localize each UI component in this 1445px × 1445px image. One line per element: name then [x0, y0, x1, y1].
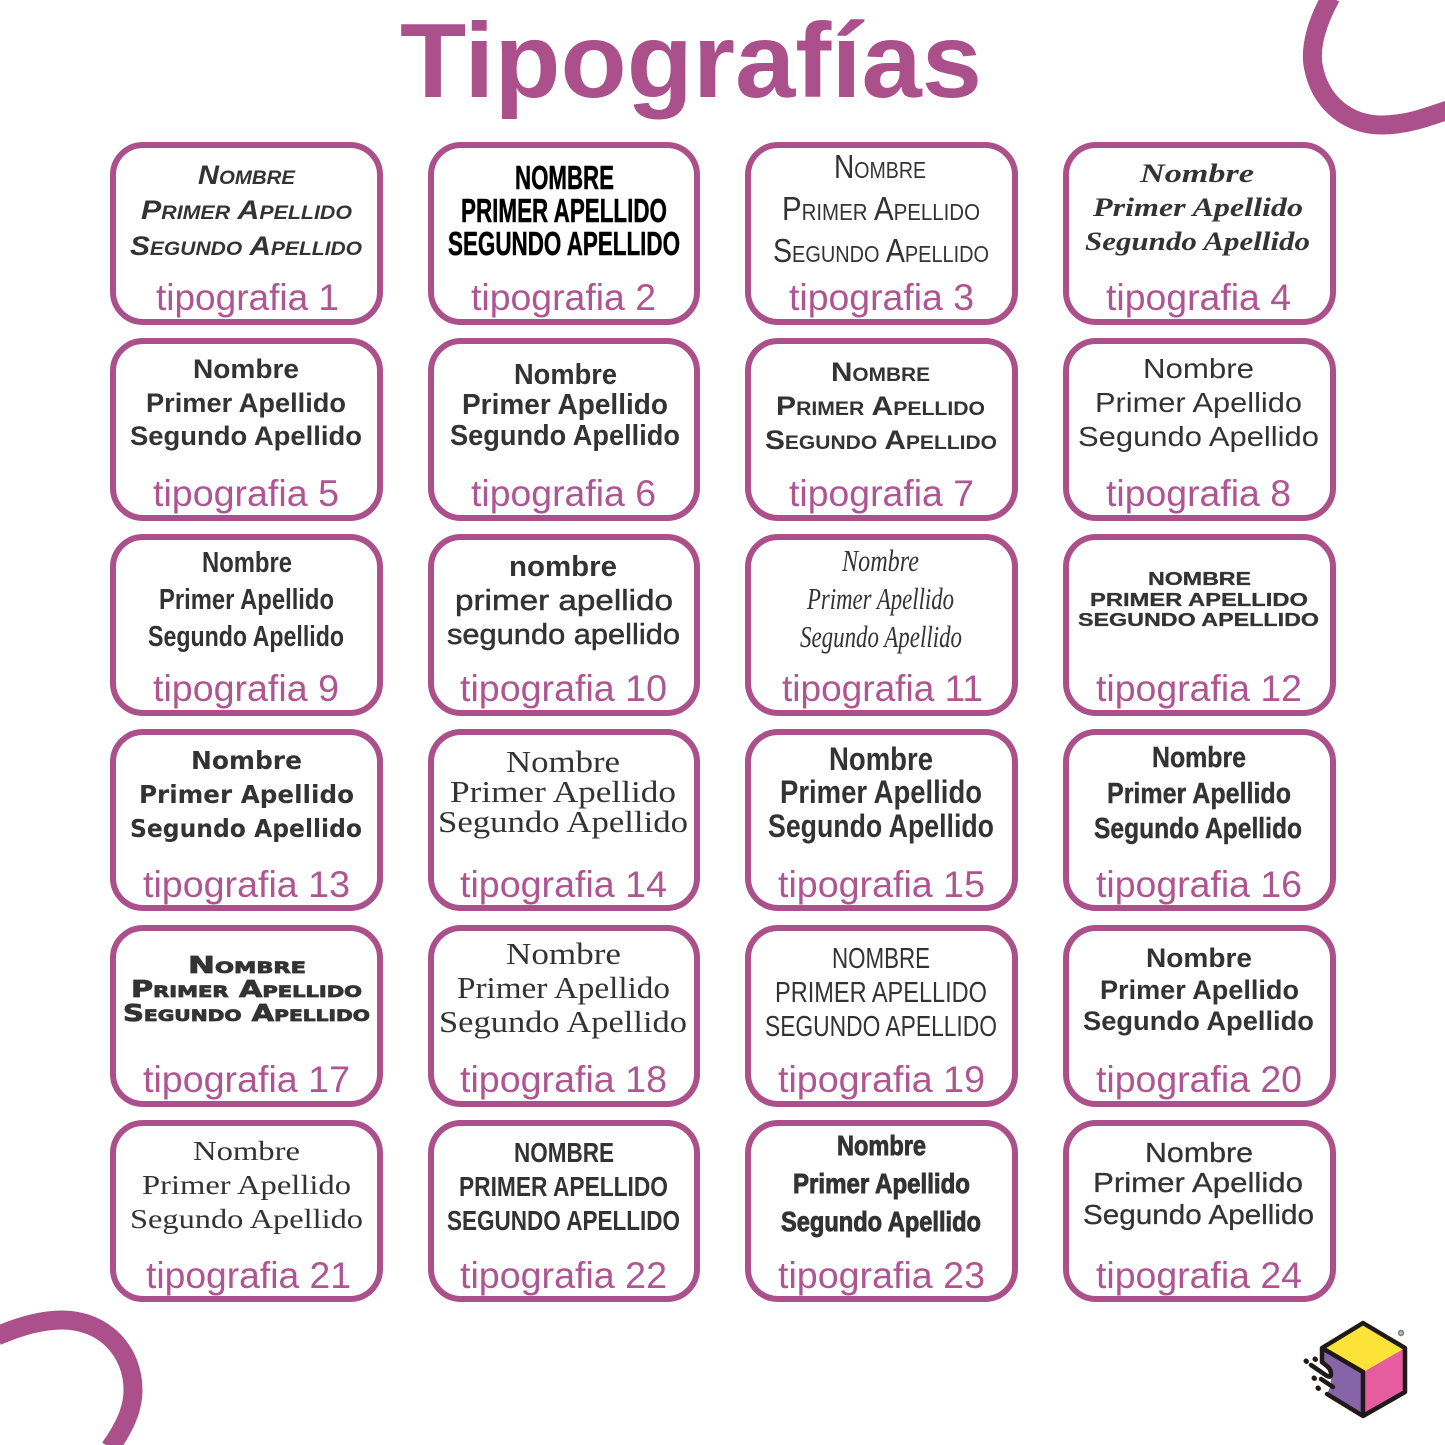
panel: tipografia 20: tipografia 20: [1096, 1059, 1302, 1100]
panel: tipografia 21: Segundo Apellido: [130, 1204, 363, 1234]
panel: tipografia 16: tipografia 16: [1096, 864, 1302, 905]
panel: tipografia 3: [748, 145, 1015, 322]
panel: tipografia 1: [113, 145, 380, 322]
panel: tipografia 19: NOMBRE: [832, 943, 930, 975]
panel: tipografia 6: Primer Apellido: [462, 389, 668, 421]
panel: tipografia 20: [1066, 928, 1333, 1104]
panel: tipografia 13: tipografia 13: [143, 864, 350, 905]
panel: tipografia 22: PRIMER APELLIDO: [459, 1171, 668, 1202]
icon: cube logo: [1306, 1323, 1405, 1416]
panel: tipografia 4: tipografia 4: [1106, 277, 1291, 318]
panel: tipografia 19: tipografia 19: [778, 1059, 985, 1100]
panel: tipografia 8: tipografia 8: [1106, 473, 1291, 514]
panel: tipografia 5: [113, 341, 380, 518]
panel: tipografia 18: tipografia 18: [460, 1059, 667, 1100]
panel: tipografia 9: Nombre: [202, 547, 292, 579]
panel: tipografia 17: Nombre: [188, 953, 306, 979]
panel: tipografia 15: Primer Apellido: [780, 774, 982, 810]
panel: tipografia 7: [748, 341, 1015, 518]
panel: tipografia 2: tipografia 2: [471, 277, 656, 318]
panel: tipografia 11: Segundo Apellido: [800, 619, 962, 654]
panel: tipografia 15: [748, 732, 1015, 908]
panel: tipografia 2: SEGUNDO APELLIDO: [448, 225, 680, 262]
panel: tipografia 4: [1066, 145, 1333, 322]
panel: tipografia 4: Segundo Apellido: [1085, 227, 1310, 256]
panel: tipografia 23: Segundo Apellido: [781, 1206, 981, 1237]
panel: tipografia 21: tipografia 21: [146, 1255, 351, 1296]
panel: tipografia 16: Nombre: [1152, 742, 1246, 774]
panel: tipografia 18: Primer Apellido: [457, 970, 670, 1005]
panel: tipografia 21: Primer Apellido: [142, 1170, 351, 1200]
panel: tipografia 23: Primer Apellido: [793, 1168, 970, 1199]
panel: tipografia 6: tipografia 6: [471, 473, 656, 514]
panel: tipografia 17: [113, 928, 380, 1104]
title: Tipografías: [400, 2, 982, 120]
panel: tipografia 9: Segundo Apellido: [148, 621, 344, 653]
panel: tipografia 14: Nombre: [506, 744, 620, 779]
panel: tipografia 20: Nombre: [1146, 943, 1252, 973]
panel: tipografia 1: Segundo Apellido: [130, 231, 362, 261]
panel: tipografia 17: tipografia 17: [143, 1059, 350, 1100]
panel: tipografia 18: Segundo Apellido: [439, 1004, 687, 1039]
panel: tipografia 10: tipografia 10: [460, 668, 667, 709]
panel: tipografia 9: Primer Apellido: [159, 584, 334, 616]
panel: tipografia 3: Segundo Apellido: [773, 232, 989, 269]
panel: tipografia 22: SEGUNDO APELLIDO: [447, 1205, 680, 1236]
panel: tipografia 10: nombre: [509, 551, 617, 583]
panel: tipografia 15: Segundo Apellido: [768, 808, 994, 844]
panel: tipografia 12: PRIMER APELLIDO: [1090, 590, 1308, 610]
panel: tipografia 14: [431, 732, 697, 908]
panel: tipografia 1: Primer Apellido: [141, 195, 352, 225]
panel: tipografia 13: [113, 732, 380, 908]
panel: tipografia 8: Primer Apellido: [1095, 387, 1302, 418]
panel: tipografia 22: tipografia 22: [460, 1255, 667, 1296]
panel: tipografia 24: tipografia 24: [1096, 1255, 1302, 1296]
panel: tipografia 14: Segundo Apellido: [438, 804, 688, 839]
panel: tipografia 9: tipografia 9: [153, 668, 339, 709]
panel: tipografia 9: [113, 537, 380, 713]
panel: tipografia 13: Nombre: [191, 746, 302, 775]
panel: tipografia 11: [748, 537, 1015, 713]
panel: tipografia 19: [748, 928, 1015, 1104]
panel: tipografia 12: SEGUNDO APELLIDO: [1078, 610, 1319, 630]
decorative arc: top right: [1312, 0, 1445, 125]
panel: tipografia 24: Primer Apellido: [1093, 1167, 1303, 1198]
panel: tipografia 23: Nombre: [837, 1130, 926, 1161]
panel: tipografia 19: PRIMER APELLIDO: [775, 977, 987, 1009]
panel: tipografia 7: Segundo Apellido: [765, 425, 997, 455]
panel: tipografia 10: [431, 537, 697, 713]
panel: tipografia 1: tipografia 1: [156, 277, 339, 318]
panel: tipografia 5: Nombre: [193, 354, 299, 384]
panel: tipografia 23: [748, 1123, 1015, 1299]
panel: tipografia 12: NOMBRE: [1148, 569, 1251, 589]
panel: tipografia 6: Nombre: [514, 359, 617, 391]
panel: tipografia 8: Nombre: [1143, 353, 1254, 384]
panel: tipografia 8: Segundo Apellido: [1078, 421, 1319, 452]
panel: tipografia 21: Nombre: [193, 1136, 300, 1166]
panel: tipografia 5: Primer Apellido: [146, 388, 346, 418]
panel: tipografia 3: tipografia 3: [789, 277, 974, 318]
panel: tipografia 17: Primer Apellido: [131, 977, 362, 1003]
panel: tipografia 10: segundo apellido: [447, 619, 680, 651]
panel: tipografia 15: Nombre: [829, 741, 933, 777]
panel: tipografia 23: tipografia 23: [778, 1255, 985, 1296]
panel: tipografia 19: SEGUNDO APELLIDO: [765, 1011, 997, 1043]
panel: tipografia 20: Segundo Apellido: [1083, 1006, 1314, 1036]
panel: tipografia 15: tipografia 15: [778, 864, 985, 905]
panel: tipografia 11: tipografia 11: [782, 668, 983, 709]
panel: tipografia 7: Primer Apellido: [776, 391, 985, 421]
panel: tipografia 13: Primer Apellido: [139, 780, 354, 809]
panel: tipografia 4: Primer Apellido: [1092, 193, 1303, 222]
panel: tipografia 3: Primer Apellido: [782, 190, 980, 227]
panel: tipografia 16: Primer Apellido: [1107, 778, 1291, 810]
panel: tipografia 22: NOMBRE: [514, 1137, 614, 1168]
panel: tipografia 5: tipografia 5: [153, 473, 339, 514]
panel: tipografia 2: [431, 145, 697, 322]
decorative arc: bottom left: [0, 1320, 133, 1445]
panel: tipografia 2: PRIMER APELLIDO: [461, 192, 667, 229]
panel: tipografia 5: Segundo Apellido: [130, 421, 362, 451]
panel: tipografia 7: tipografia 7: [789, 473, 974, 514]
panel: tipografia 11: Nombre: [841, 543, 919, 578]
panel: tipografia 2: NOMBRE: [515, 159, 614, 196]
panel: tipografia 14: tipografia 14: [460, 864, 667, 905]
panel: tipografia 20: Primer Apellido: [1100, 975, 1299, 1005]
panel: tipografia 1: Nombre: [198, 160, 296, 190]
panel: tipografia 10: primer apellido: [455, 585, 673, 617]
panel: tipografia 4: Nombre: [1139, 159, 1254, 188]
panel: tipografia 18: [431, 928, 697, 1104]
panel: tipografia 22: [431, 1123, 697, 1299]
panel: tipografia 24: Segundo Apellido: [1083, 1199, 1314, 1230]
panel: tipografia 14: Primer Apellido: [450, 774, 676, 809]
panel: tipografia 6: Segundo Apellido: [450, 420, 680, 452]
panel: tipografia 24: Nombre: [1145, 1137, 1253, 1168]
panel: tipografia 21: [113, 1123, 380, 1299]
panel: tipografia 18: Nombre: [506, 936, 621, 971]
panel: tipografia 11: Primer Apellido: [806, 581, 954, 616]
panel: tipografia 7: Nombre: [831, 357, 930, 387]
panel: tipografia 12: tipografia 12: [1096, 668, 1302, 709]
panel: tipografia 16: Segundo Apellido: [1094, 813, 1302, 845]
panel: tipografia 24: [1066, 1123, 1333, 1299]
panel: tipografia 12: [1066, 537, 1333, 713]
panel: tipografia 6: [431, 341, 697, 518]
panel: tipografia 16: [1066, 732, 1333, 908]
panel: tipografia 3: Nombre: [834, 148, 926, 185]
panel: tipografia 8: [1066, 341, 1333, 518]
panel: tipografia 17: Segundo Apellido: [123, 1001, 370, 1027]
panel: tipografia 13: Segundo Apellido: [130, 814, 362, 843]
